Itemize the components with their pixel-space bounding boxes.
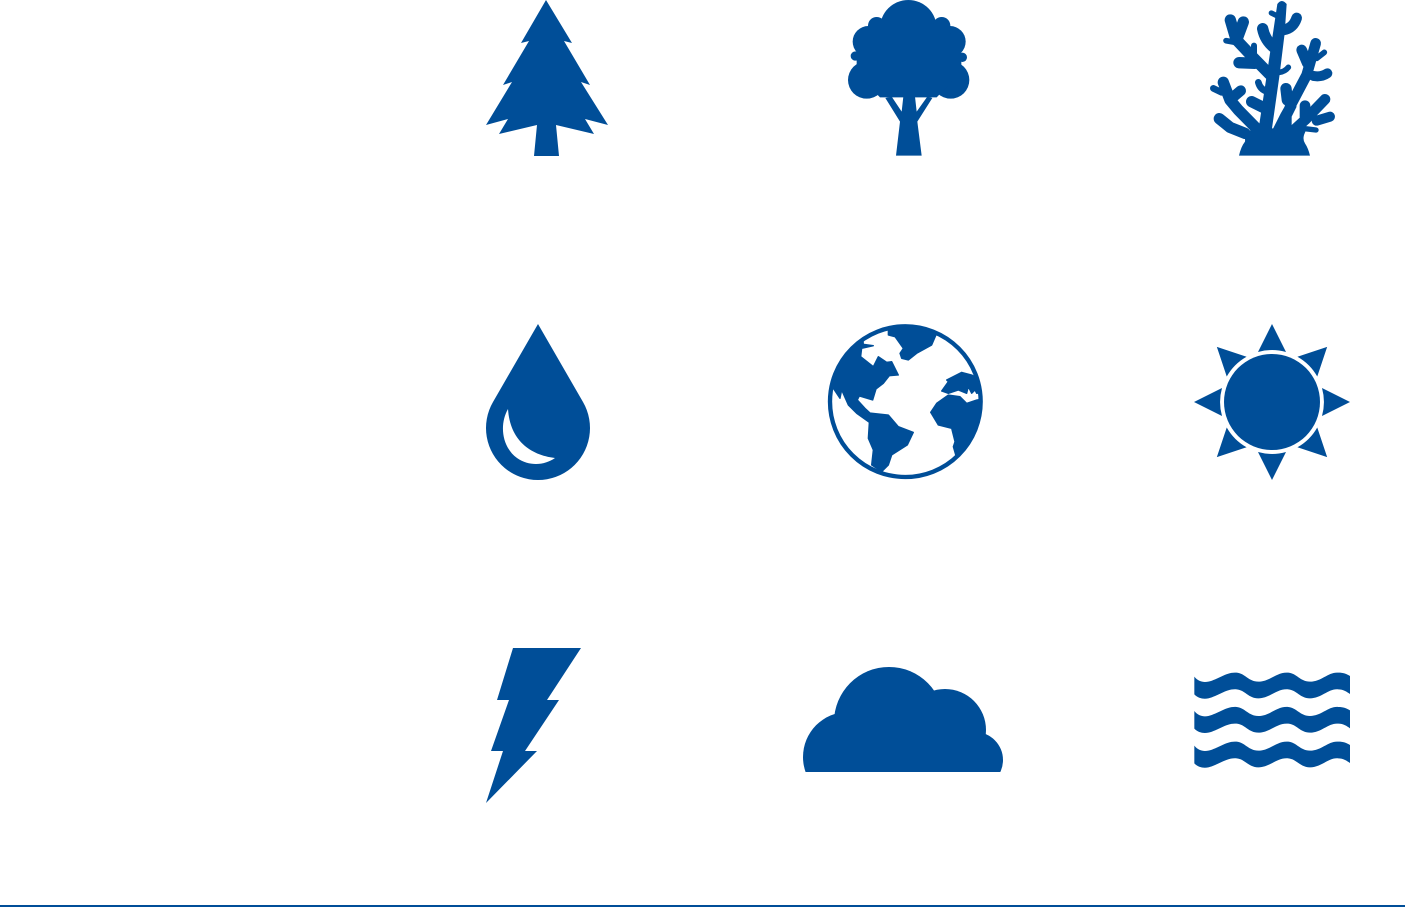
icon: water waves (1194, 673, 1350, 768)
icon: water drop (486, 324, 590, 480)
icon: cloud (803, 667, 1003, 772)
icon: lightning bolt (486, 648, 581, 803)
icon: globe (830, 322, 987, 477)
icon: coral (1213, 1, 1330, 156)
bottom rule (0, 905, 1405, 907)
icon: broadleaf tree (848, 0, 969, 156)
icon: sun (1194, 324, 1350, 480)
icon: pine tree (486, 0, 608, 156)
